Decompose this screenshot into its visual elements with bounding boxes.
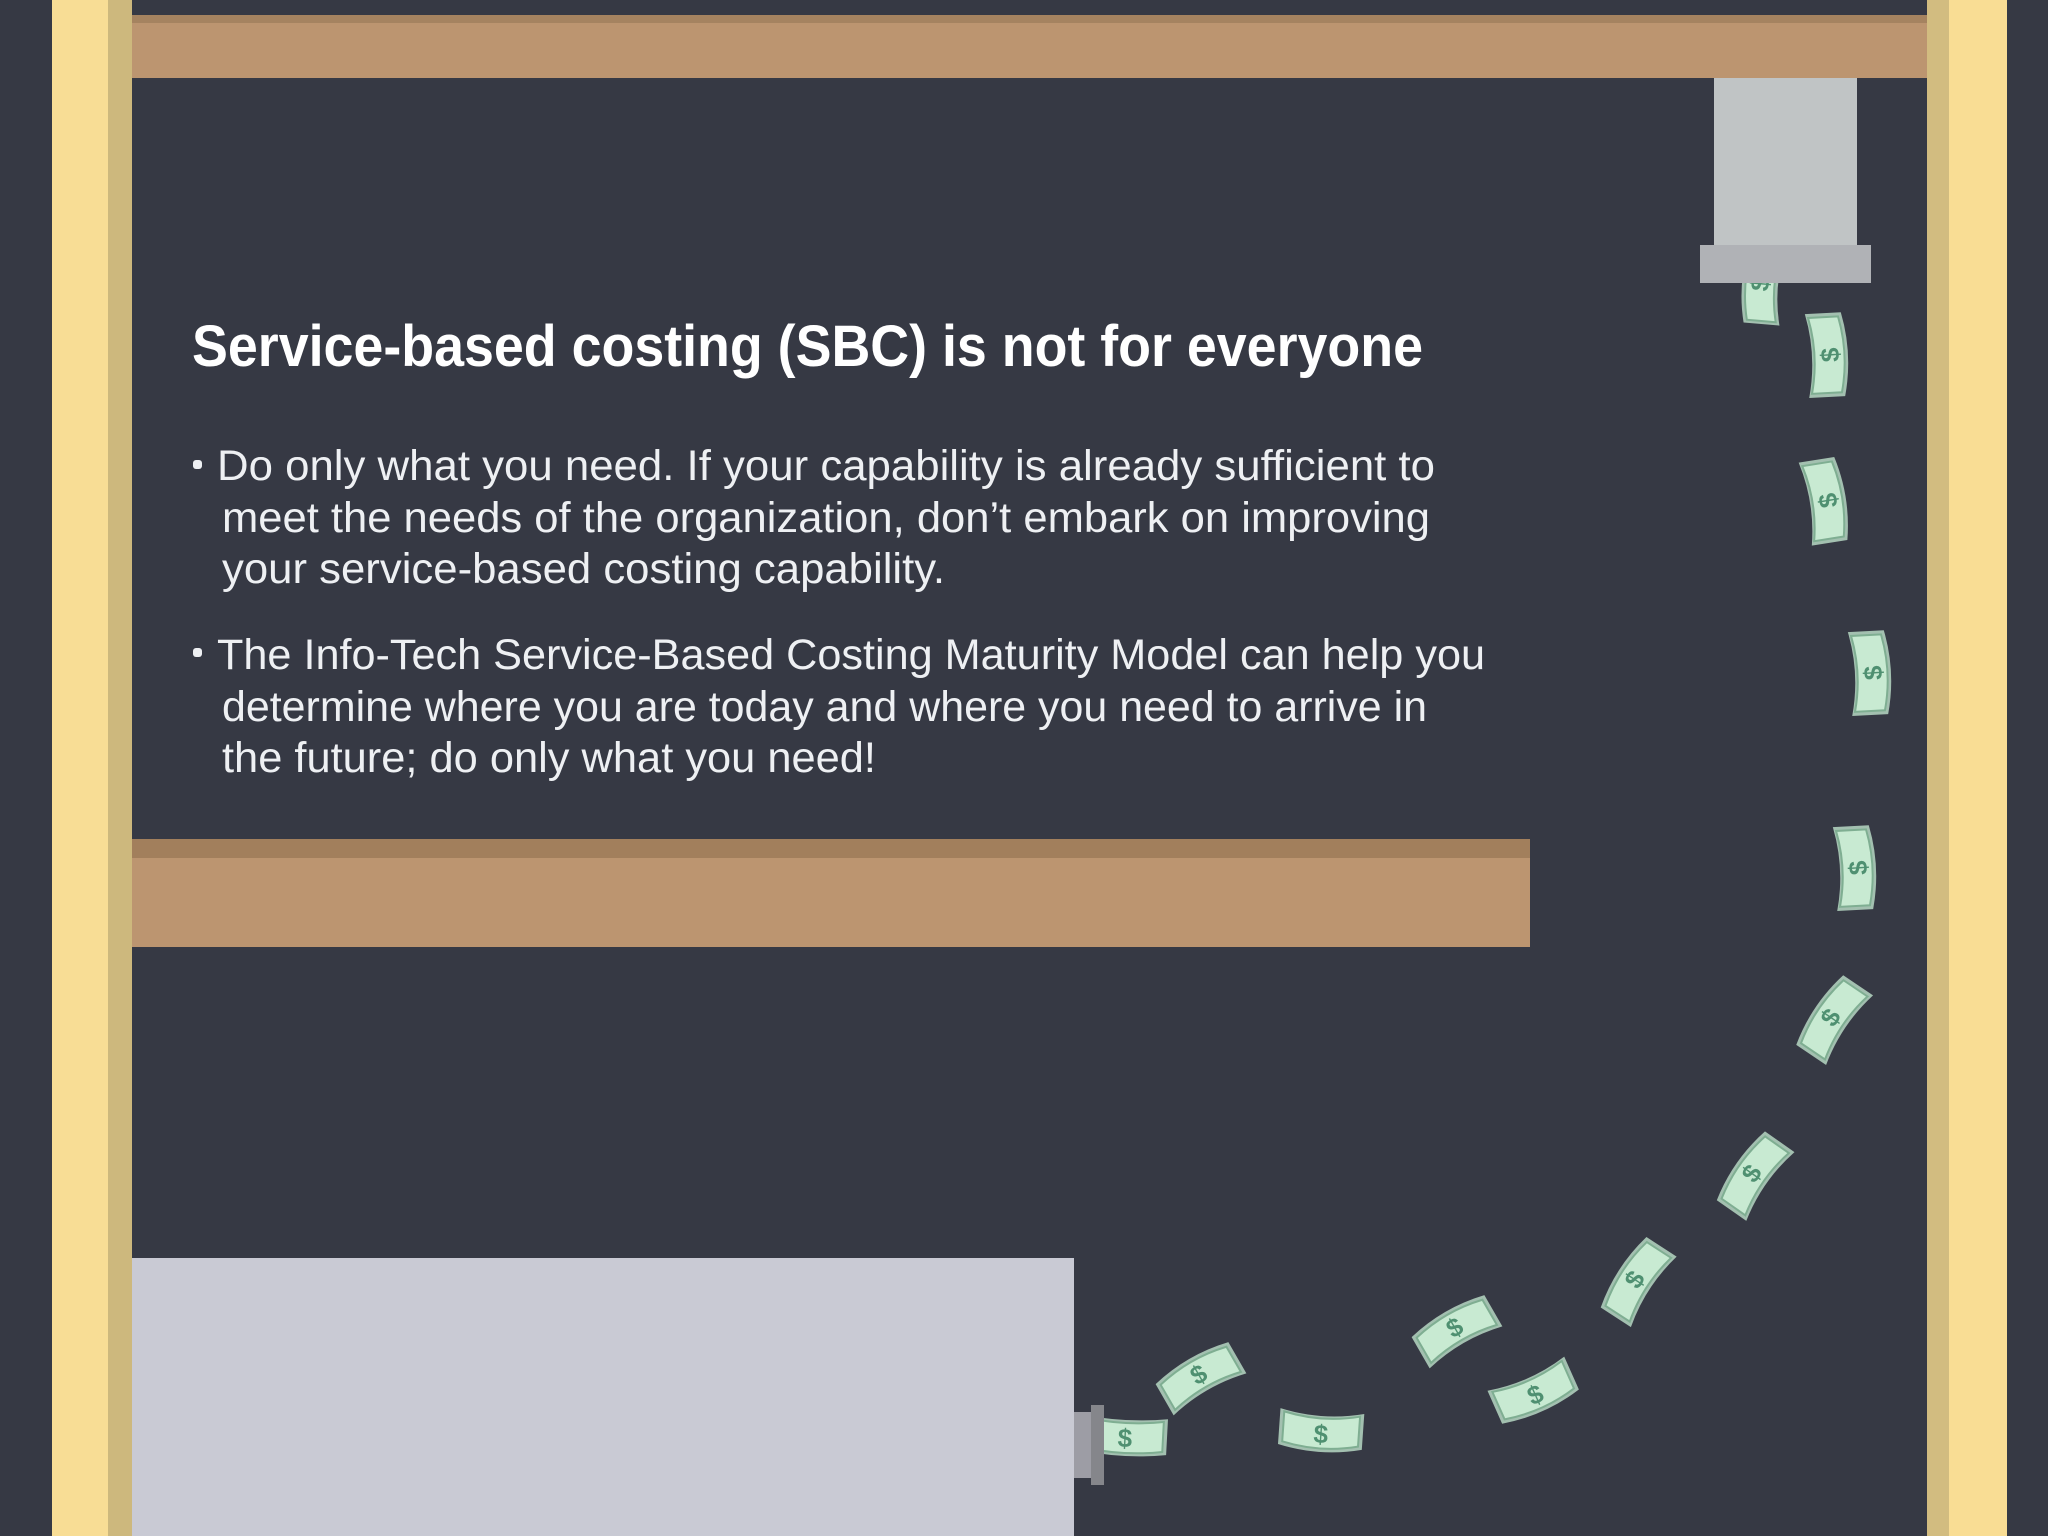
bullet text: do only what you need xyxy=(193,442,1435,593)
falling bill 10 xyxy=(1409,1291,1502,1368)
bullet text: do only what you need: Do only what you need. If your capability is already sufficient to xyxy=(217,442,1435,490)
falling bill 6: $ xyxy=(1814,1002,1847,1032)
right wooden post xyxy=(1927,0,2007,1536)
falling bill 7: $ xyxy=(1735,1158,1768,1188)
bullet text: do only what you need: meet the needs of the organization, don’t embark on improving xyxy=(222,494,1430,542)
bill emerging from spout xyxy=(1082,1415,1168,1458)
falling bill 4 xyxy=(1848,630,1893,716)
falling bill 11: $ xyxy=(1313,1419,1330,1449)
falling bill 3: $ xyxy=(1812,491,1844,510)
middle shelf xyxy=(132,839,1530,947)
bullet text: maturity model: The Info-Tech Service-Based Costing Maturity Model can help you xyxy=(217,631,1485,679)
falling bill 3 xyxy=(1799,456,1852,546)
falling bill 1 under the chute: $ xyxy=(1744,275,1776,292)
falling bill 1 under the chute xyxy=(1739,242,1786,326)
falling bill 7 xyxy=(1713,1129,1794,1221)
falling bill 4: $ xyxy=(1858,664,1888,681)
falling bill 12: $ xyxy=(1185,1358,1213,1391)
falling bill 11 xyxy=(1278,1408,1364,1455)
tank spout xyxy=(1074,1405,1104,1485)
falling bill 8: $ xyxy=(1618,1265,1651,1294)
falling bill 2: $ xyxy=(1815,346,1845,363)
falling bill 9: $ xyxy=(1523,1378,1548,1411)
falling bill 5 xyxy=(1833,825,1878,911)
bullet text: do only what you need: your service-based costing capability. xyxy=(222,545,945,593)
collection tank xyxy=(132,1258,1074,1536)
falling bill 5: $ xyxy=(1843,859,1873,876)
falling bill 9 xyxy=(1487,1357,1581,1428)
falling bill 10: $ xyxy=(1441,1311,1469,1344)
falling bill 8 xyxy=(1597,1234,1677,1327)
top shelf xyxy=(132,15,1927,78)
bullet text: maturity model: the future; do only what you need! xyxy=(222,734,876,782)
ceiling chute xyxy=(1700,78,1871,283)
heading: Service-based costing (SBC) is not for everyone xyxy=(192,314,1423,379)
falling bill 12 xyxy=(1153,1338,1246,1415)
falling bill 2 xyxy=(1805,312,1850,398)
left wooden post xyxy=(52,0,132,1536)
bill emerging from spout: $ xyxy=(1117,1423,1133,1453)
bullet text: maturity model: determine where you are today and where you need to arrive in xyxy=(222,683,1427,731)
falling bill 6 xyxy=(1792,972,1873,1065)
bullet text: maturity model xyxy=(193,631,1485,782)
